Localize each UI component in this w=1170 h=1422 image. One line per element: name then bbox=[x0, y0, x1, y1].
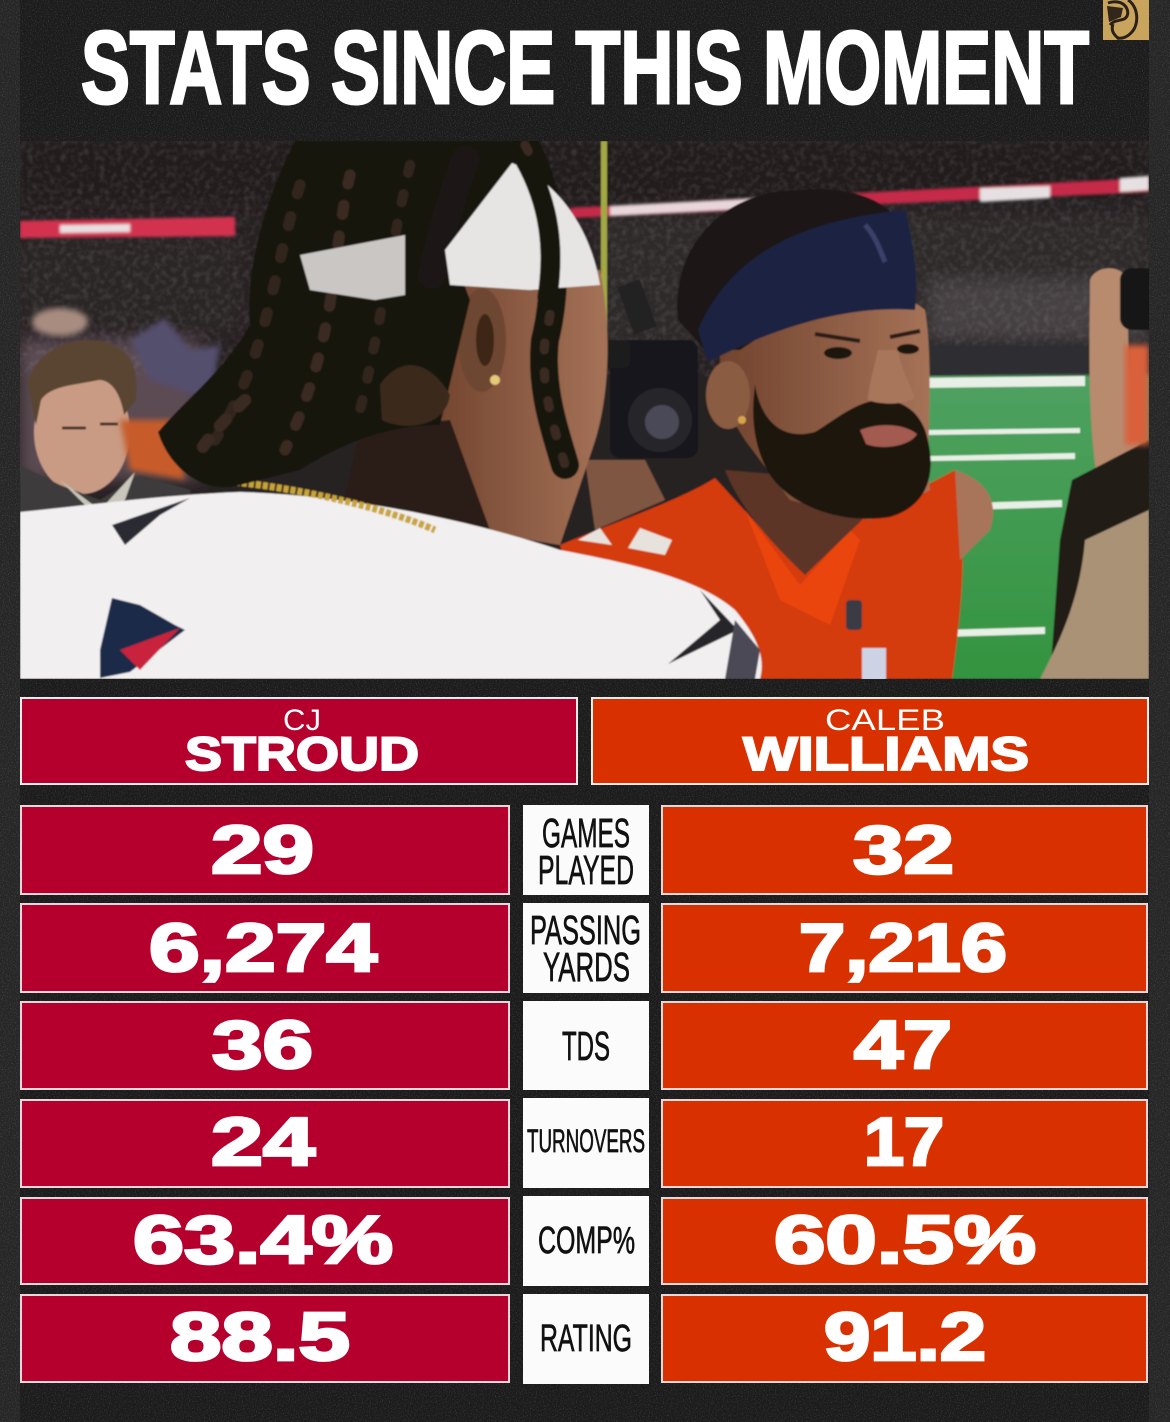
Williams TDs: 47 bbox=[854, 1007, 952, 1083]
panel: Caleb Williams header bbox=[592, 698, 1148, 784]
Williams turnovers: 17 bbox=[864, 1104, 944, 1180]
label: passing yards: YARDS bbox=[543, 944, 630, 990]
CJ Stroud: dreadlocks bbox=[158, 141, 565, 487]
row: touchdowns bbox=[21, 1001, 1147, 1090]
last name: Williams: WILLIAMS bbox=[743, 727, 1029, 780]
Williams rating: 91.2 bbox=[824, 1299, 986, 1375]
right photographer bbox=[1040, 268, 1160, 679]
logo badge: gold lion bbox=[1103, 0, 1149, 40]
Caleb Williams: hair and headband bbox=[677, 189, 916, 362]
row: passing yards bbox=[21, 903, 1147, 993]
left background person bbox=[20, 304, 222, 512]
label: turnovers: TURNOVERS bbox=[527, 1123, 645, 1159]
field lines bbox=[920, 376, 1085, 637]
red LED ribbon board bbox=[20, 176, 1149, 238]
Stroud turnovers: 24 bbox=[211, 1104, 315, 1180]
label: games played: GAMES bbox=[542, 810, 630, 856]
camera on shoulder rig bbox=[580, 279, 698, 530]
CJ Stroud: white headband bbox=[445, 163, 600, 290]
row: turnovers bbox=[21, 1098, 1147, 1188]
first name: CJ: CJ bbox=[283, 704, 321, 737]
label: TDs: TDS bbox=[562, 1023, 610, 1069]
stadium crowd bbox=[20, 141, 1149, 480]
first name: Caleb: CALEB bbox=[825, 704, 945, 737]
green field bbox=[927, 372, 1149, 679]
label: rating: RATING bbox=[540, 1318, 632, 1360]
goal post bbox=[601, 141, 607, 341]
label: games played: PLAYED bbox=[538, 847, 634, 893]
Stroud yards: 6,274 bbox=[149, 910, 377, 986]
Caleb Williams: jersey bbox=[560, 470, 993, 680]
row: completion percentage bbox=[21, 1196, 1147, 1286]
label: comp%: COMP% bbox=[538, 1220, 635, 1262]
Williams completion: 60.5% bbox=[774, 1202, 1036, 1278]
Stroud completion: 63.4% bbox=[133, 1202, 393, 1278]
CJ Stroud: white jersey bbox=[20, 482, 762, 679]
Stroud games: 29 bbox=[211, 812, 314, 888]
CJ Stroud: neck and ear bbox=[340, 270, 608, 545]
Williams games: 32 bbox=[853, 812, 954, 888]
Stroud rating: 88.5 bbox=[170, 1299, 350, 1375]
last name: Stroud: STROUD bbox=[185, 727, 419, 780]
Stroud TDs: 36 bbox=[212, 1007, 313, 1083]
row: passer rating bbox=[21, 1294, 1147, 1384]
label: passing yards: PASSING bbox=[530, 907, 641, 953]
panel: CJ Stroud header bbox=[21, 698, 577, 784]
strand over band bbox=[525, 160, 551, 300]
Caleb Williams: neck and face bbox=[706, 291, 931, 575]
Williams yards: 7,216 bbox=[799, 910, 1007, 986]
row: games played bbox=[21, 805, 1147, 895]
photo: two quarterbacks meeting on the field bbox=[20, 141, 1160, 680]
